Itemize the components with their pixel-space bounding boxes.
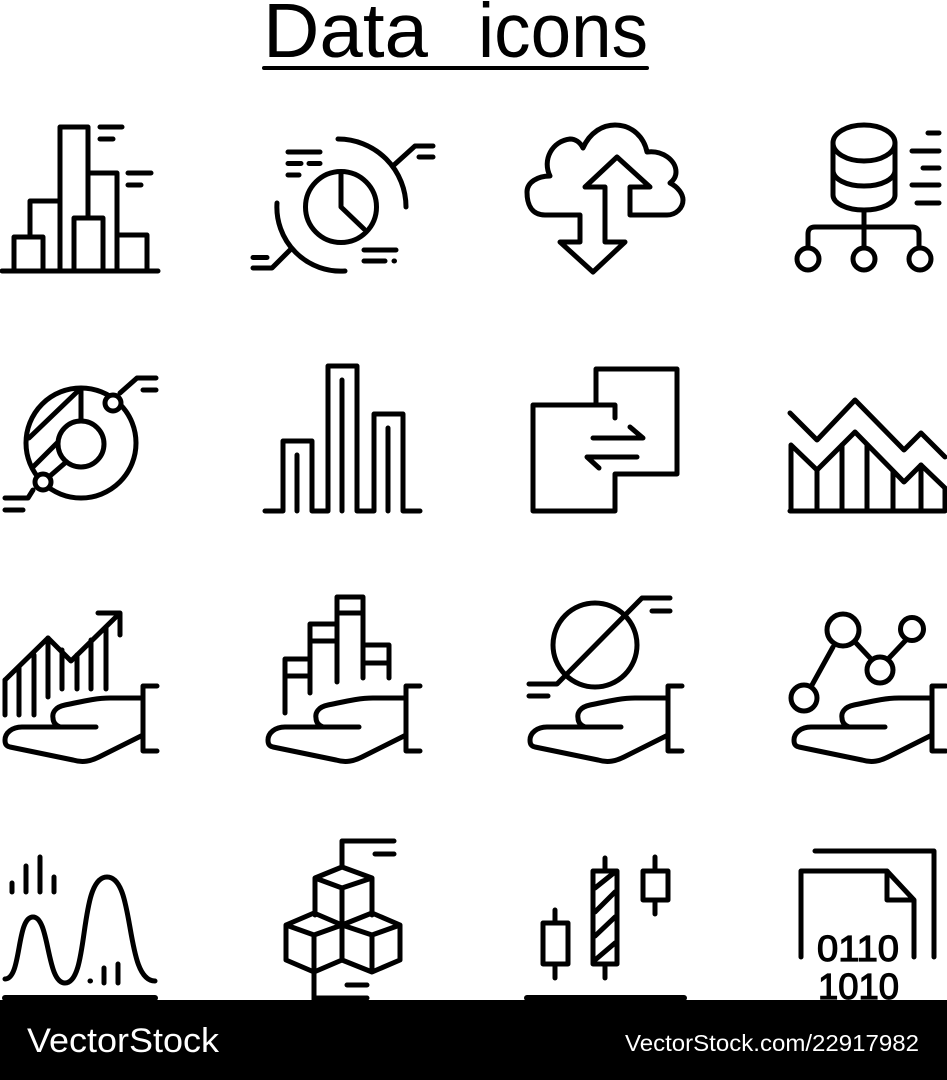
icon: donut chart with hatched segment <box>5 378 156 510</box>
footer: watermark bar: VectorStock.com/22917982 <box>625 1030 919 1056</box>
icon: cloud with up and down arrows <box>527 125 683 272</box>
footer: watermark bar: VectorStock <box>27 1022 220 1060</box>
icon: falling area line chart <box>790 400 945 511</box>
icon: database with network nodes <box>797 125 939 270</box>
icon: pie chart with orbit arcs <box>253 139 433 271</box>
icon: binary data file: 1010 <box>818 966 899 1007</box>
icon: binary data file <box>801 851 934 1007</box>
title: Data icons <box>263 0 648 74</box>
icon: overlapping documents with exchange arrows <box>533 369 677 511</box>
icon: candlestick chart <box>527 857 684 998</box>
icon: bar chart with staggered columns <box>2 127 158 271</box>
icon: three-column outline bar chart <box>265 366 420 511</box>
icon: bell curves with small bars <box>5 857 155 998</box>
icon: binary data file: 0110 <box>817 928 899 969</box>
icon: hand holding stepped bars <box>268 597 420 761</box>
icon: hand holding connected nodes <box>791 614 946 761</box>
icon: hand holding circle with diagonal <box>529 598 682 761</box>
icon: hand holding rising bar chart <box>5 613 157 761</box>
icon: stacked cubes block network <box>286 841 400 1000</box>
footer: watermark bar <box>0 1000 947 1080</box>
